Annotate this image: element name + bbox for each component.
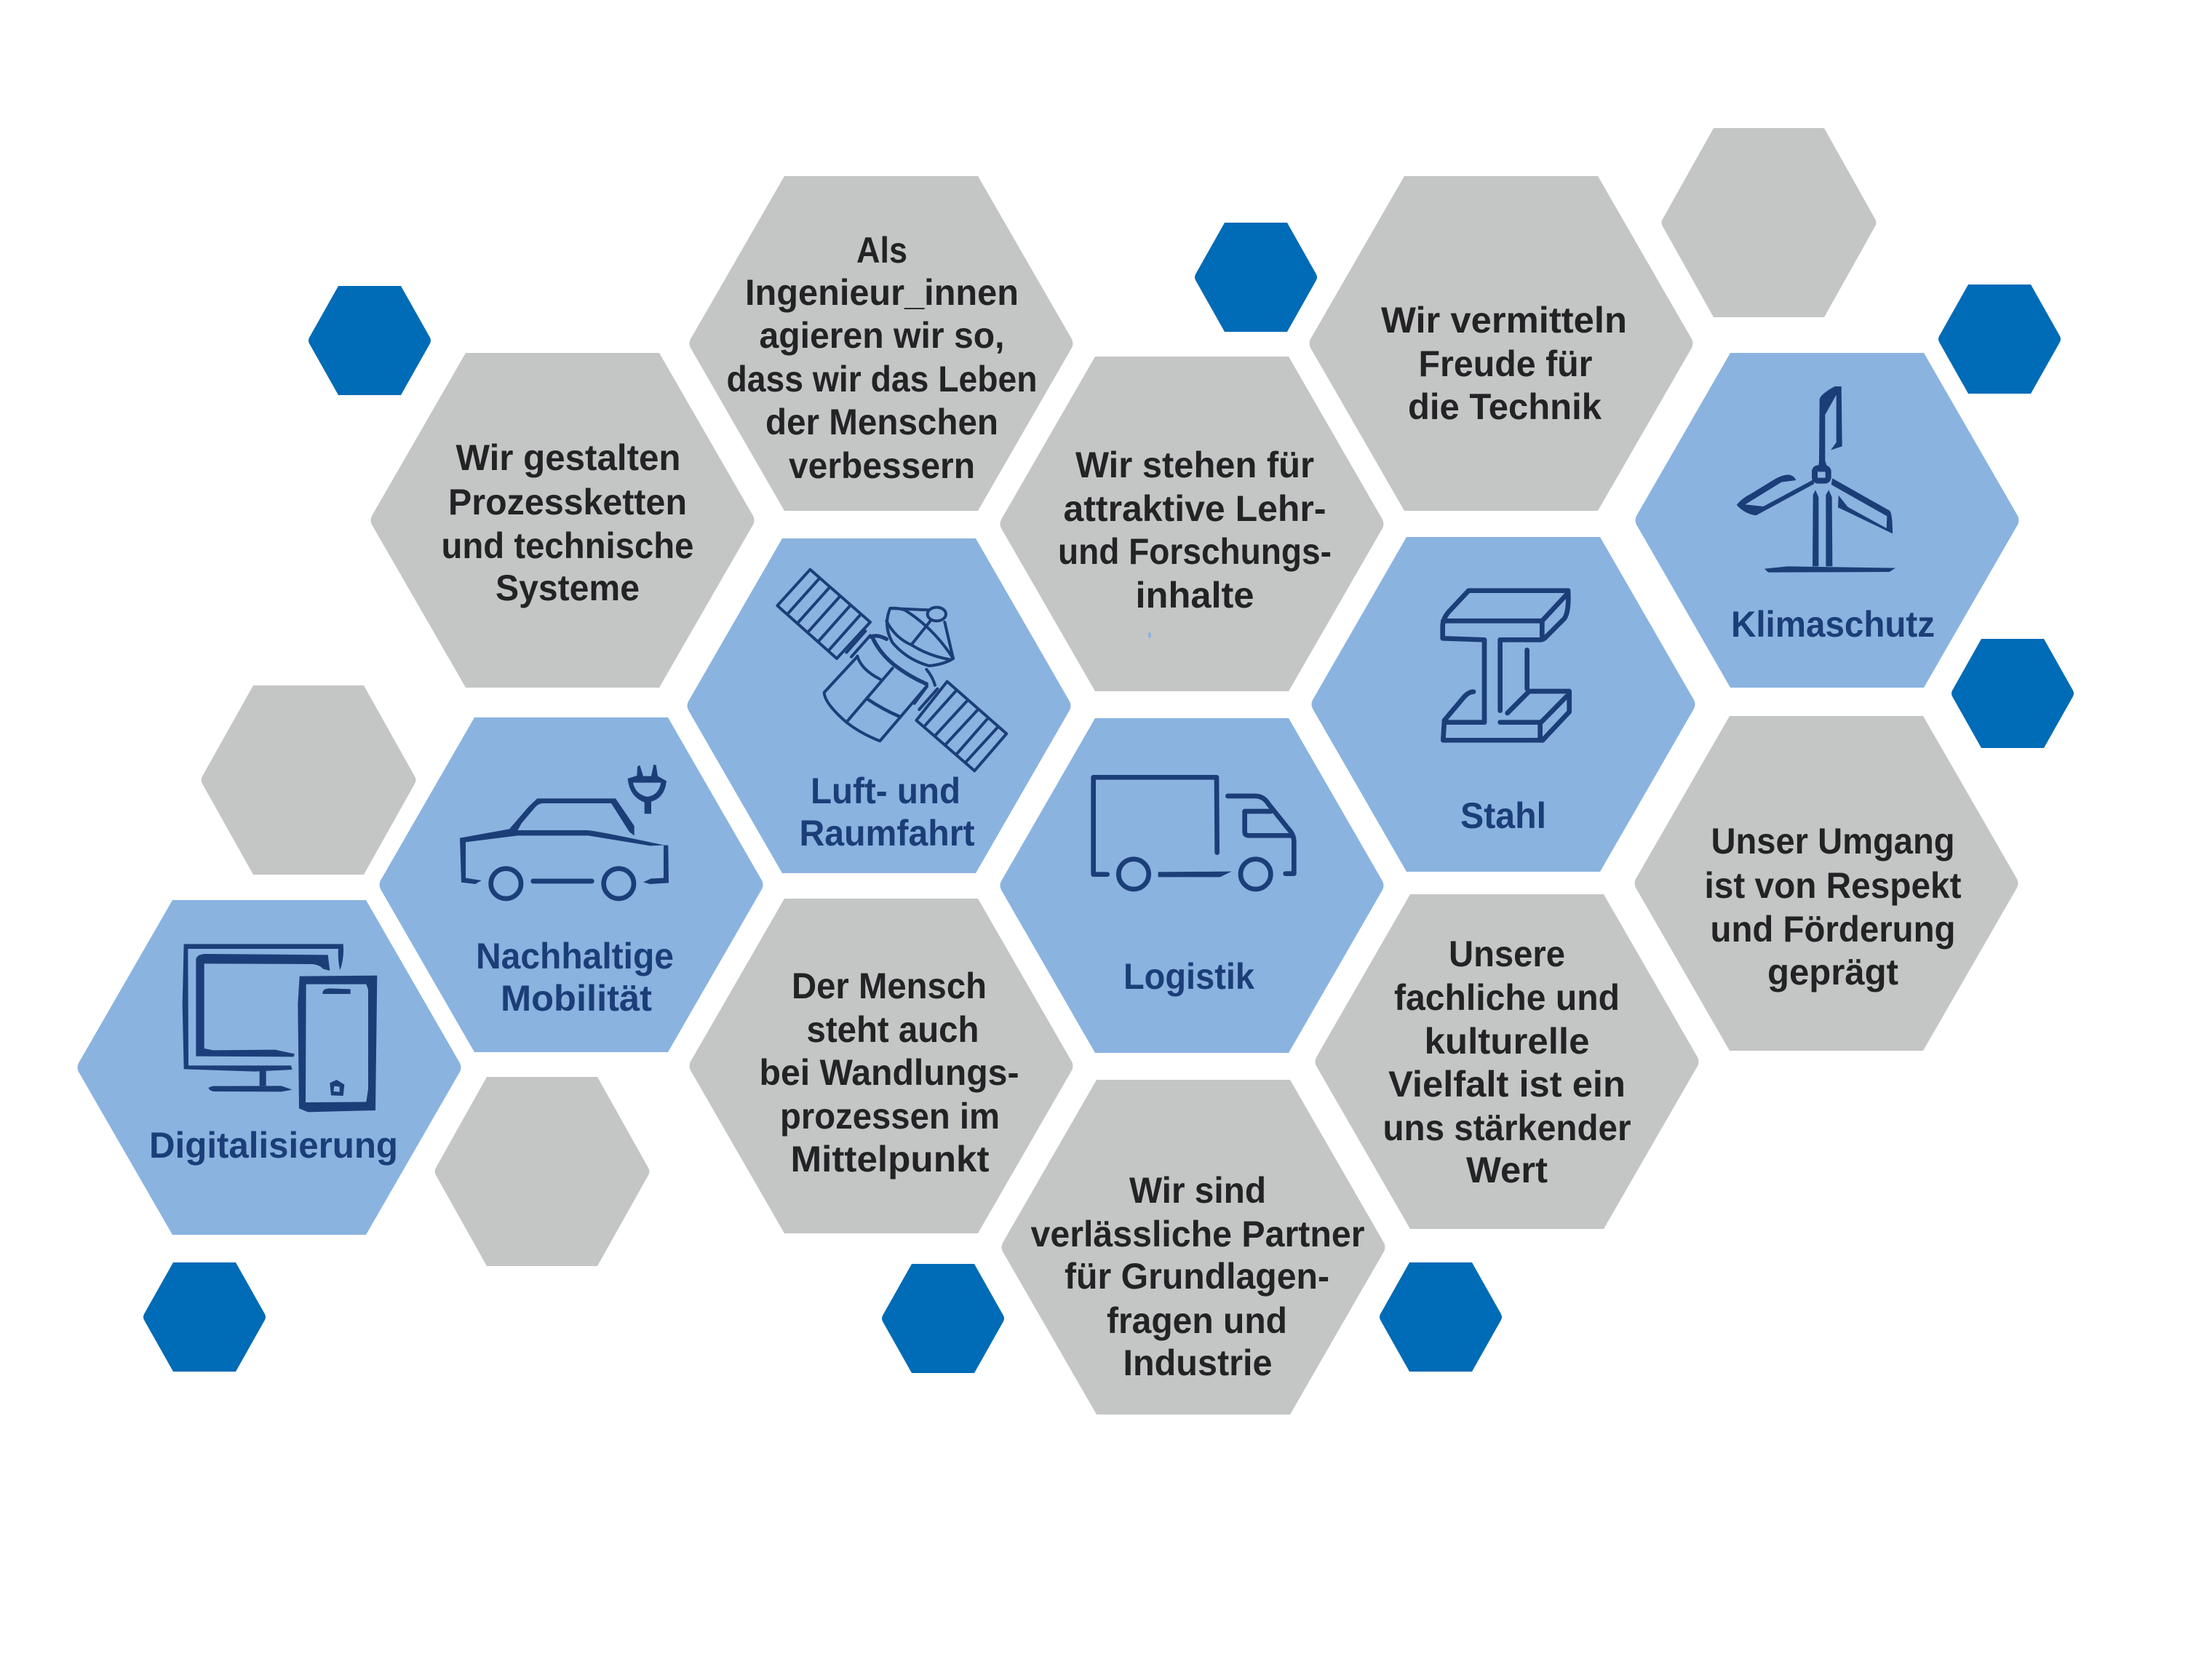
icon: monitor and phone [183,944,377,1112]
panel: Wir stehen: und Forschungs- [1058,531,1332,572]
panel: Stahl: Stahl [1460,795,1546,836]
panel: Wir sind verlässliche Partner: Wir sind [1129,1170,1266,1211]
icon: electric car [460,765,669,899]
icon: steel beam [1443,591,1570,740]
panel: Unsere fachliche und kulturelle Vielfalt: kulturelle [1425,1021,1589,1062]
panel: Der Mensch [690,899,1073,1233]
panel: Der Mensch: Mittelpunkt [790,1139,990,1179]
icon: satellite [777,570,1006,771]
panel: Logistik: Logistik [1123,956,1254,997]
hexagon: blue accent upper left [309,286,431,395]
panel: Wir sind verlässliche Partner: für Grundlagen- [1065,1256,1329,1297]
panel: Unser Umgang: geprägt [1767,952,1898,992]
panel: Digitalisierung: Digitalisierung [149,1125,398,1166]
panel: Als Ingenieur_innen [690,176,1073,511]
hexagon: decorative gray top right [1662,128,1876,317]
panel: Wir vermitteln [1310,176,1692,511]
panel: Wir vermitteln: Wir vermitteln [1381,300,1627,341]
panel: Digitalisierung [77,900,461,1235]
panel: Wir gestalten: Wir gestalten [455,437,681,478]
hexagon: blue accent bottom left [143,1262,266,1372]
icon: truck [1094,777,1294,889]
panel: Stahl [1311,537,1695,872]
panel: Nachhaltige Mobilität: Mobilität [501,978,652,1019]
panel: Luft- und Raumfahrt: Luft- und [811,771,960,811]
panel: Unsere fachliche und kulturelle Vielfalt: fachliche und [1394,977,1620,1018]
hexagon: blue accent bottom centre [882,1264,1004,1373]
panel: Unsere fachliche und kulturelle Vielfalt: uns stärkender [1382,1107,1631,1148]
panel: Wir gestalten: und technische [441,525,694,566]
panel: Wir stehen: Wir stehen für [1075,445,1314,485]
panel: Wir stehen: inhalte [1135,575,1254,616]
hexagon: blue accent top right [1938,285,2061,394]
panel: Luft- und Raumfahrt: Raumfahrt [799,813,975,854]
panel: Nachhaltige Mobilität [380,717,763,1052]
panel: Unser Umgang: ist von Respekt [1704,865,1962,906]
panel: Unsere fachliche und kulturelle Vielfalt: Unsere [1449,934,1565,974]
panel: Als Ingenieur_innen: Als [856,230,907,271]
panel: Wir gestalten [371,353,754,688]
panel: Wir stehen: attraktive Lehr- [1064,488,1326,529]
hexagon: decorative gray lower left [435,1077,649,1266]
panel: Wir stehen [1000,357,1384,691]
hexagon: blue accent top centre [1195,223,1317,332]
panel: Wir sind verlässliche Partner: fragen und [1107,1300,1287,1341]
panel: Logistik [1000,718,1384,1053]
panel: Unser Umgang: und Förderung [1710,909,1956,950]
panel: Als Ingenieur_innen: Ingenieur_innen [745,272,1019,313]
panel: Klimaschutz: Klimaschutz [1731,604,1935,645]
panel: Unser Umgang [1634,716,2018,1051]
icon: wind turbine [1737,386,1895,573]
hexagon: blue accent right [1952,639,2074,748]
panel: Der Mensch: bei Wandlungs- [760,1052,1019,1093]
panel: Unser Umgang: Unser Umgang [1711,821,1954,862]
panel: Unsere fachliche und kulturelle Vielfalt: Wert [1466,1150,1548,1190]
panel: Wir sind verlässliche Partner: Industrie [1123,1342,1272,1383]
hexagon: blue accent bottom right [1380,1262,1502,1372]
panel: Der Mensch: Der Mensch [792,966,987,1006]
panel: Der Mensch: steht auch [806,1009,979,1050]
panel: Wir sind verlässliche Partner [1001,1080,1385,1415]
panel: Nachhaltige Mobilität: Nachhaltige [476,936,674,976]
panel: Als Ingenieur_innen: dass wir das Leben [726,359,1038,399]
hexagon: decorative gray left [201,685,416,875]
panel: Wir gestalten: Prozessketten [448,482,687,522]
panel: Klimaschutz [1636,353,2018,688]
panel: Unsere fachliche und kulturelle Vielfalt [1316,894,1698,1229]
panel: Wir vermitteln: die Technik [1408,386,1602,427]
panel: Der Mensch: prozessen im [780,1096,1000,1137]
panel: Als Ingenieur_innen: agieren wir so, [760,315,1004,356]
panel: Als Ingenieur_innen: der Menschen [765,402,998,442]
panel: Wir gestalten: Systeme [496,568,640,608]
panel: Als Ingenieur_innen: verbessern [789,445,975,486]
panel: Wir sind verlässliche Partner: verlässliche Partner [1030,1214,1365,1254]
panel: Wir vermitteln: Freude für [1419,343,1592,384]
panel: Unsere fachliche und kulturelle Vielfalt: Vielfalt ist ein [1388,1064,1626,1105]
panel: Luft- und Raumfahrt [687,538,1071,873]
